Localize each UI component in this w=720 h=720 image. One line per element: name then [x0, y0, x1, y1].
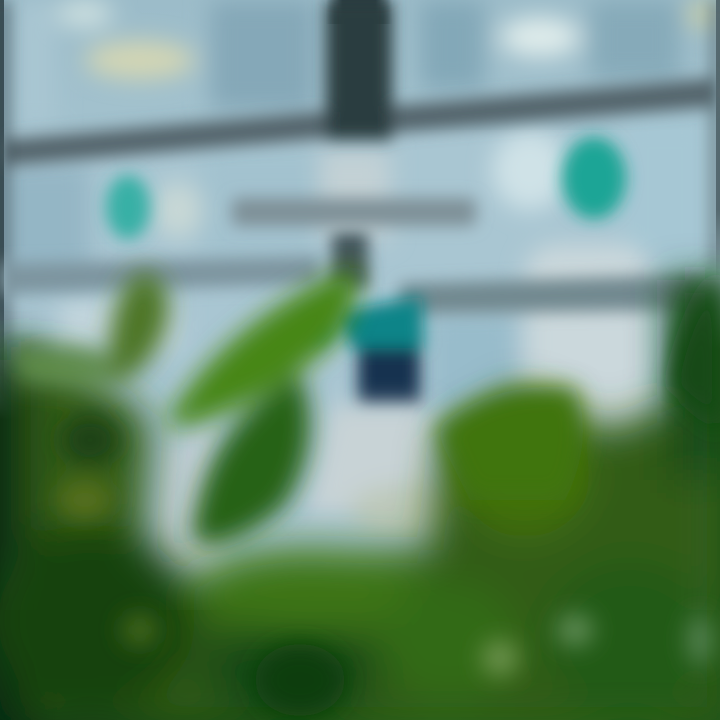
foliage: highlights — [57, 480, 113, 520]
leaf: far right — [670, 265, 720, 430]
teal circle left — [106, 175, 150, 239]
sign text blur — [232, 198, 476, 226]
foliage mass — [0, 265, 720, 720]
leaf: left band — [10, 345, 115, 385]
hanging planter — [302, 296, 424, 408]
window frame bars — [0, 0, 720, 400]
leaf: upper left — [108, 270, 169, 382]
leaf: center lower — [192, 375, 310, 545]
leaf: center diagonal — [165, 265, 357, 425]
teal circle right — [562, 137, 626, 219]
pale lower wall — [150, 405, 470, 575]
leaf: right cluster — [435, 387, 583, 500]
